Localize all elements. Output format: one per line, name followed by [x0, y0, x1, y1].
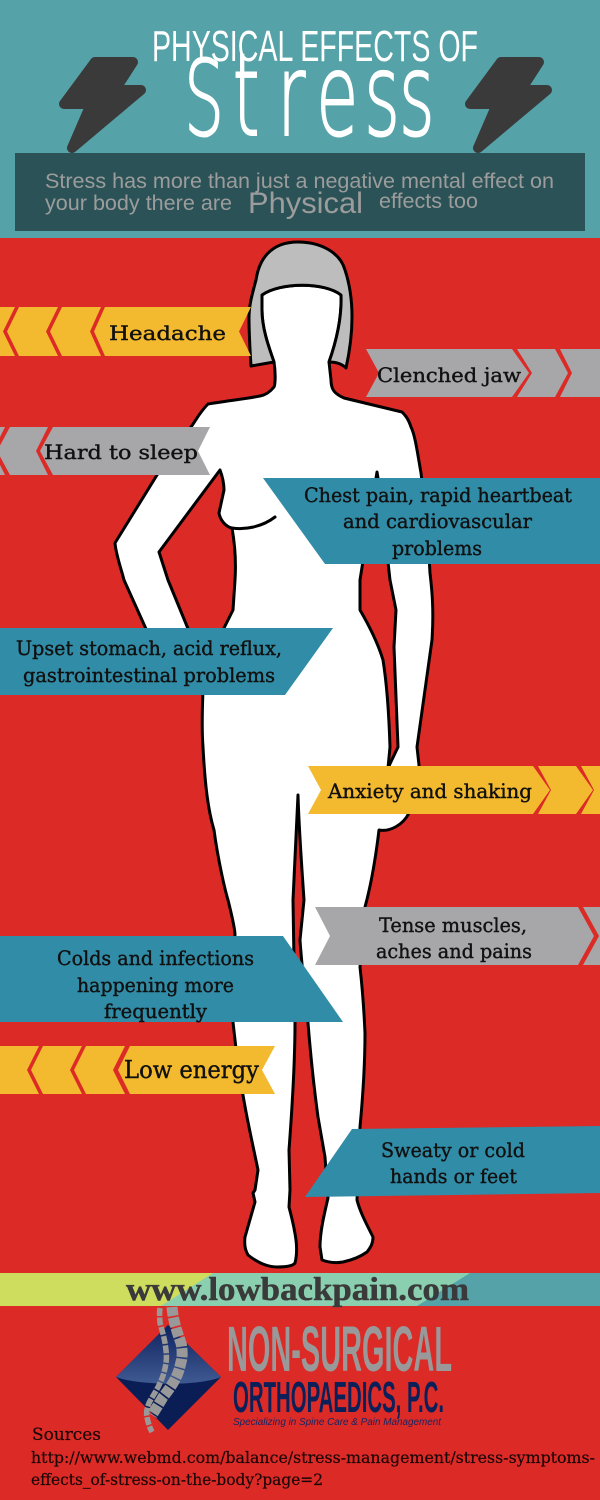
callout: sweaty hands: Sweaty or cold	[381, 1138, 525, 1162]
intro text: effects too	[379, 190, 478, 213]
panel: teal header	[0, 0, 600, 238]
callout: sweaty hands: hands or feet	[390, 1164, 517, 1188]
callout: tense muscles	[315, 907, 600, 965]
title: stress: S	[184, 39, 224, 160]
callout: anxiety	[308, 766, 600, 814]
icon: left lightning bolt	[64, 62, 141, 148]
intro text: your body there are	[45, 192, 232, 215]
left arm gap	[159, 470, 235, 636]
callout: colds and infections: frequently	[104, 999, 208, 1023]
callout: colds and infections	[0, 936, 343, 1023]
sources: Sources	[32, 1425, 101, 1445]
callout: upset stomach: gastrointestinal problems	[23, 663, 275, 687]
intro text	[45, 170, 554, 220]
callout: low energy	[0, 1046, 275, 1094]
callout: tense muscles: aches and pains	[376, 939, 532, 963]
right arm gap	[360, 472, 398, 768]
icon: right lightning bolt	[470, 62, 547, 148]
callout: upset stomach: Upset stomach, acid reflux,	[16, 636, 282, 660]
title: stress: tress	[233, 31, 435, 163]
website banner	[0, 1272, 600, 1308]
sources	[31, 1425, 595, 1489]
callout: headache	[0, 307, 251, 356]
callout: clenched jaw	[366, 349, 600, 397]
intro text: Physical	[248, 187, 363, 220]
logo: non-surgical orthopaedics	[116, 1307, 452, 1432]
callout: hard to sleep	[0, 427, 210, 475]
callout: upset stomach	[0, 628, 333, 695]
callout: headache: Headache	[109, 321, 226, 345]
callout: chest pain: problems	[392, 536, 482, 560]
callout: chest pain: Chest pain, rapid heartbeat	[304, 483, 572, 507]
logo tagline: Specializing in Spine Care & Pain Management	[233, 1416, 442, 1428]
panel: intro box	[15, 153, 585, 231]
callout: sweaty hands	[305, 1126, 600, 1197]
callout: hard to sleep: Hard to sleep	[44, 440, 198, 464]
hair	[249, 242, 352, 368]
intro text: Stress has more than just a negative mental effect on	[45, 170, 554, 193]
sources: http://www.webmd.com/balance/stress-management/stress-symptoms-	[31, 1449, 595, 1467]
callout: chest pain: and cardiovascular	[343, 509, 532, 533]
sources: effects_of-stress-on-the-body?page=2	[31, 1471, 323, 1489]
body silhouette	[115, 242, 433, 1267]
callout: low energy: Low energy	[124, 1056, 259, 1084]
website banner: www.lowbackpain.com	[126, 1272, 469, 1308]
callout: chest pain	[263, 478, 600, 564]
callout: colds and infections: happening more	[77, 973, 234, 997]
icon: diamond with spine	[116, 1307, 221, 1432]
chest line	[232, 517, 275, 529]
callout: colds and infections: Colds and infections	[57, 946, 254, 970]
callout: anxiety: Anxiety and shaking	[327, 779, 532, 803]
callout: clenched jaw: Clenched jaw	[377, 363, 521, 387]
callout: tense muscles: Tense muscles,	[379, 913, 527, 937]
